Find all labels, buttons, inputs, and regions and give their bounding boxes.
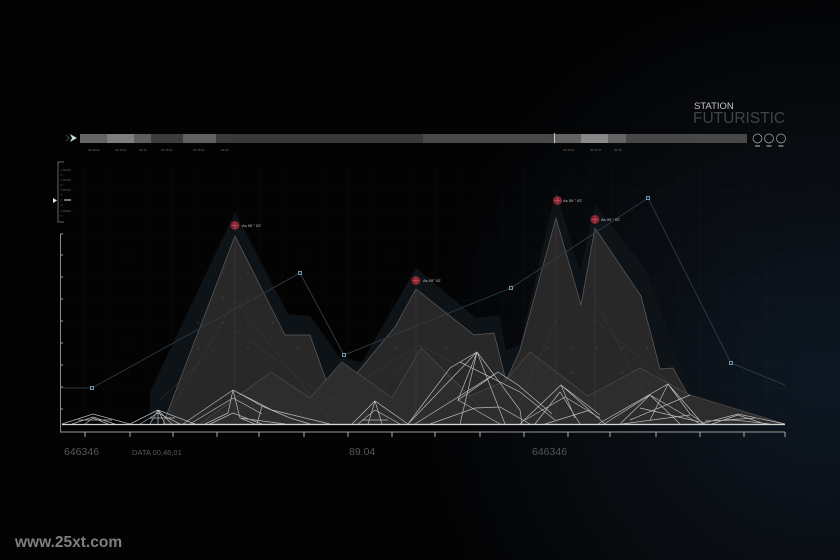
- secondary gray layer: [200, 348, 785, 424]
- axis labels: 646346: [532, 446, 567, 458]
- red marker: peak 2: As 05° 02': [423, 278, 441, 283]
- axis labels: 646346: [64, 446, 99, 458]
- watermark: www.25xt.com: [14, 534, 122, 551]
- main gray area: [163, 218, 785, 424]
- three circle gauges: [753, 134, 786, 146]
- title: Station Futuristic: [693, 101, 785, 127]
- chart y axis: [60, 234, 785, 432]
- timeline tick labels: [88, 148, 622, 152]
- arrow icon: [66, 134, 77, 142]
- chart x axis ticks: [85, 432, 785, 437]
- title: Station Futuristic: FUTURISTIC: [693, 110, 785, 127]
- axis labels: DATA 00,46,01: [132, 448, 182, 457]
- timeline tick labels: 00:46: [221, 148, 229, 152]
- timeline tick labels: 00:46:01: [161, 148, 173, 152]
- timeline tick labels: 00:46:01: [193, 148, 205, 152]
- red marker: peak 3: As 05 ° 02': [563, 198, 582, 203]
- timeline tick labels: 00:46:01: [590, 148, 602, 152]
- vertical scale gauge: [53, 162, 71, 222]
- red marker: peak 4: As 05 ° 02': [601, 217, 620, 222]
- red marker: peak 1: As 05 ° 02': [242, 223, 262, 228]
- red marker: peak 3: [553, 196, 582, 205]
- white wireframe mountains: [62, 352, 785, 424]
- red marker: peak 4: [590, 215, 620, 224]
- axis labels: 89.04: [349, 446, 375, 458]
- blue connector line with data nodes: [62, 196, 785, 390]
- timeline tick labels: 00:46: [614, 148, 622, 152]
- timeline tick labels: 00:46:01: [115, 148, 127, 152]
- red marker: peak 2: [412, 276, 441, 285]
- baseline: [62, 424, 785, 426]
- axis labels: [64, 446, 567, 458]
- timeline bar: [80, 133, 747, 143]
- faint inner mesh: [160, 218, 690, 424]
- timeline tick labels: 00:46:01: [88, 148, 100, 152]
- timeline tick labels: 00:46:01: [563, 148, 575, 152]
- title: Station Futuristic: STATION: [694, 101, 734, 112]
- timeline tick labels: 00:46: [139, 148, 147, 152]
- red marker: peak 1: [230, 221, 262, 230]
- mesh dots: [197, 272, 648, 374]
- dark shadow area: [150, 190, 785, 424]
